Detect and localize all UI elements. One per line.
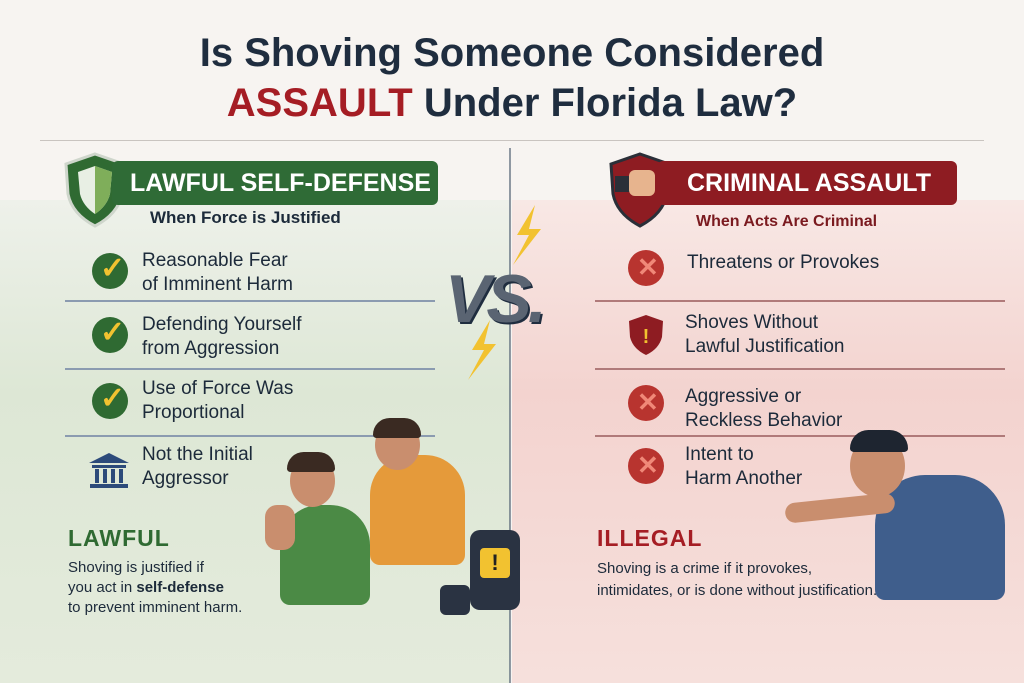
- item: defending yourself: from Aggression: [142, 338, 279, 359]
- lawful conclusion: Shoving is justified if: [68, 559, 204, 576]
- item: threatens: Threatens or Provokes: [687, 252, 879, 273]
- banner: [657, 161, 957, 205]
- title: [200, 31, 824, 125]
- item: defending yourself: Defending Yourself: [142, 314, 302, 335]
- icon: green shield: [64, 152, 120, 228]
- lawful conclusion: you act in self-defense: [68, 579, 224, 596]
- item: shoves: !: [643, 326, 649, 348]
- item: aggressive: [628, 385, 842, 431]
- VS emblem: VS.: [445, 261, 543, 337]
- illegal conclusion: [597, 525, 877, 599]
- item: shoves: Lawful Justification: [685, 336, 844, 357]
- icon: camera device: !: [491, 550, 499, 575]
- item: defending yourself: ✓: [100, 316, 125, 349]
- item: defending yourself: [92, 314, 302, 359]
- item: aggressive: Aggressive or: [685, 386, 801, 407]
- lawful conclusion: to prevent imminent harm.: [68, 599, 242, 616]
- item: reasonable fear: ✓: [100, 252, 125, 285]
- lawful conclusion: LAWFUL: [68, 525, 170, 551]
- subtitle left: When Force is Justified: [150, 208, 341, 227]
- item: shoves: Shoves Without: [685, 312, 818, 333]
- item: threatens: ✕: [637, 252, 659, 282]
- item: reasonable fear: Reasonable Fear: [142, 250, 288, 271]
- banner: [112, 161, 438, 205]
- item: proportional: Use of Force Was: [142, 378, 293, 399]
- illegal conclusion: ILLEGAL: [597, 525, 702, 551]
- subtitle right: When Acts Are Criminal: [696, 213, 877, 230]
- background: right red panel: [512, 200, 1024, 683]
- item: intent: [628, 444, 802, 489]
- item: proportional: Proportional: [142, 402, 244, 423]
- banner: CRIMINAL ASSAULT: [687, 169, 931, 197]
- item: intent: Intent to: [685, 444, 754, 465]
- item: not initial aggressor: Aggressor: [142, 468, 229, 489]
- illustration: angry man pointing: [785, 430, 1005, 600]
- item: intent: Harm Another: [685, 468, 802, 489]
- VS emblem: [445, 205, 543, 380]
- banner: LAWFUL SELF-DEFENSE: [130, 169, 431, 197]
- item: aggressive: ✕: [637, 387, 659, 417]
- illegal conclusion: Shoving is a crime if it provokes,: [597, 560, 812, 577]
- item: intent: ✕: [637, 450, 659, 480]
- background: left green panel: [0, 200, 510, 683]
- item: not initial aggressor: Not the Initial: [142, 444, 253, 465]
- icon: camera device: [440, 530, 520, 615]
- item: reasonable fear: [92, 250, 293, 295]
- item: not initial aggressor: [89, 444, 253, 489]
- icon: lightning: [513, 205, 541, 265]
- illustration: shoving figures: [265, 418, 465, 605]
- title: ASSAULT Under Florida Law?: [227, 81, 797, 125]
- icon: red shield with fist: [609, 152, 665, 228]
- header: lawful self-defense: [64, 152, 438, 228]
- illegal conclusion: intimidates, or is done without justification.: [597, 582, 877, 599]
- right items: [595, 250, 1005, 489]
- item: proportional: [92, 378, 293, 423]
- item: shoves: [629, 312, 844, 357]
- lawful conclusion: [68, 525, 242, 616]
- item: proportional: ✓: [100, 382, 125, 415]
- item: reasonable fear: of Imminent Harm: [142, 274, 293, 295]
- item: threatens: [628, 250, 879, 286]
- header: criminal assault: [609, 152, 957, 228]
- item: aggressive: Reckless Behavior: [685, 410, 842, 431]
- left items: [65, 250, 435, 489]
- title: Is Shoving Someone Considered: [200, 31, 824, 75]
